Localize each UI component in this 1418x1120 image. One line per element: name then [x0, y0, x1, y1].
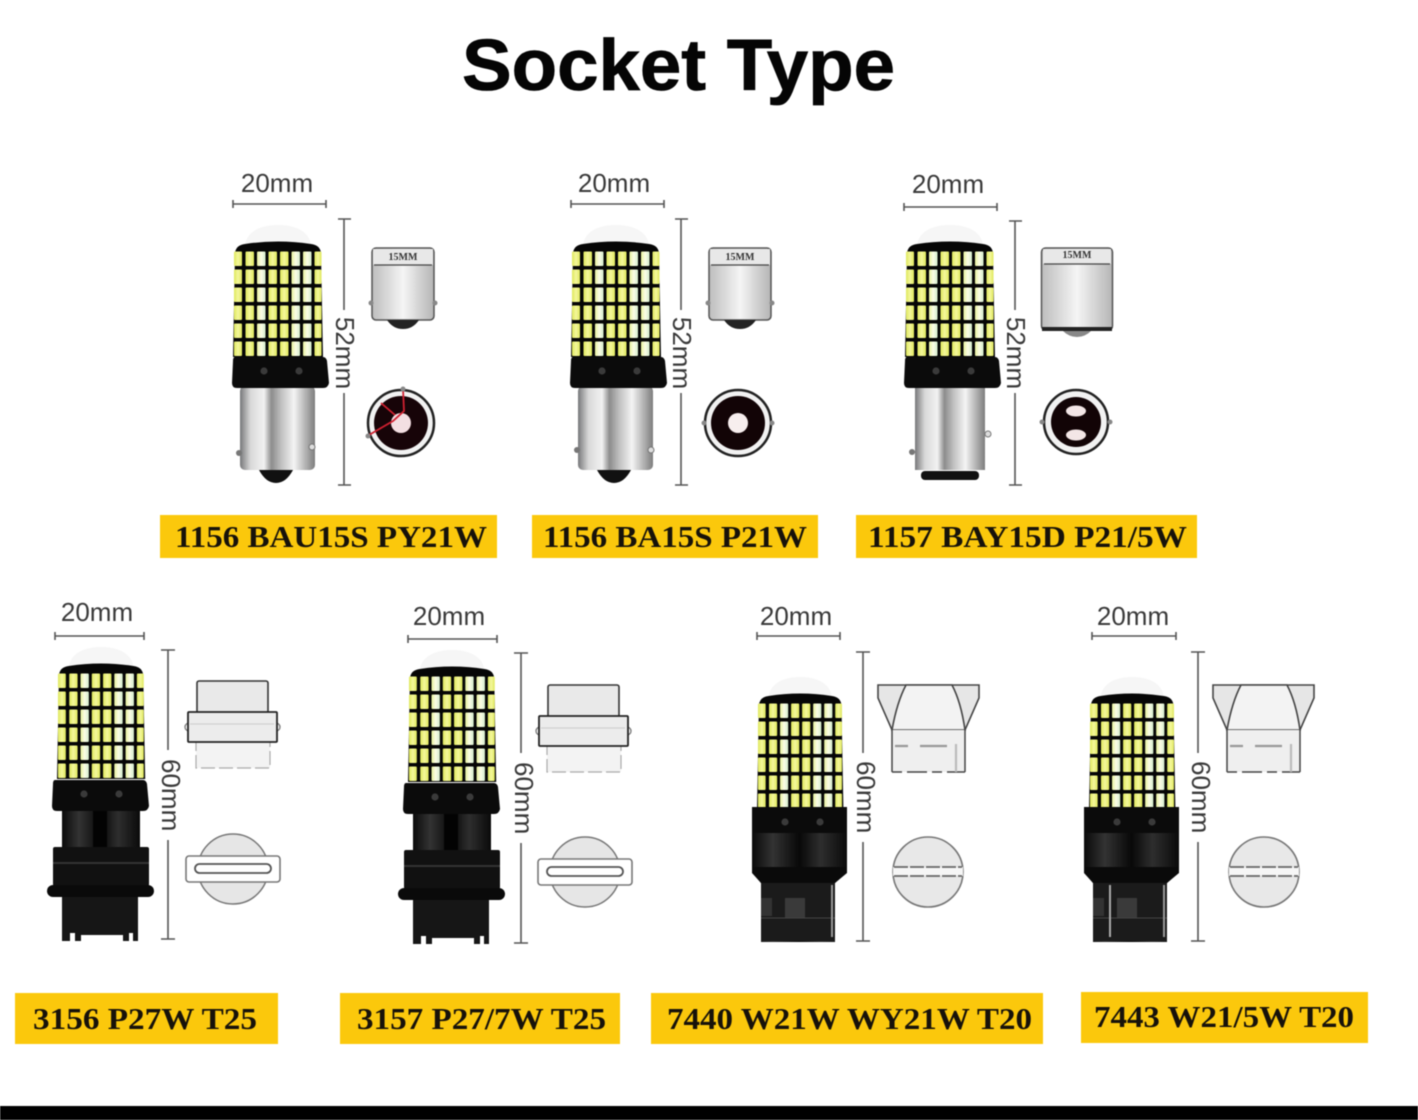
bulb: 3156 [47, 647, 154, 941]
side view socket [368, 248, 438, 329]
side view socket [536, 685, 631, 772]
dimension: width 20mm: 20mm [578, 168, 650, 198]
dimension: height 60mm: 60mm [851, 761, 881, 833]
label: 7440 W21W WY21W T20 [651, 993, 1043, 1044]
dimension: height 52mm [1001, 221, 1031, 485]
label: 3156 P27W T25 [15, 993, 278, 1044]
label: 3157 P27/7W T25 [340, 993, 620, 1044]
dimension: width 20mm [1092, 601, 1176, 640]
panel: 3157 P27/7W T25 [340, 601, 632, 1044]
dimension: height 52mm: 52mm [330, 317, 360, 389]
label: 3156 P27W T25: 3156 P27W T25 [33, 1001, 257, 1036]
side view socket [878, 685, 979, 772]
dimension: width 20mm [408, 601, 497, 643]
label: 7440 W21W WY21W T20: 7440 W21W WY21W T20 [667, 1001, 1032, 1036]
side view socket [1213, 685, 1314, 772]
side view socket [1042, 248, 1112, 337]
dimension: height 60mm: 60mm [1186, 761, 1216, 833]
dimension: width 20mm: 20mm [61, 597, 133, 627]
bottom view socket [1229, 837, 1299, 907]
bottom view socket [538, 837, 632, 907]
side view socket [185, 681, 280, 768]
dimension: height 52mm [330, 219, 360, 485]
side view socket [706, 248, 774, 329]
dimension: width 20mm [233, 168, 326, 208]
dimension: width 20mm: 20mm [760, 601, 832, 631]
dimension: height 60mm: 60mm [509, 762, 539, 834]
title: Socket Type [462, 26, 895, 106]
label: 1156 BAU15S PY21W: 1156 BAU15S PY21W [175, 519, 487, 554]
bulb: BA15S [570, 225, 667, 483]
bottom view socket [186, 834, 280, 904]
bulb: 3157 [398, 650, 505, 944]
dimension: width 20mm: 20mm [1097, 601, 1169, 631]
dimension: height 52mm [667, 219, 697, 485]
bottom view socket [893, 837, 963, 907]
label: 7443 W21/5W T20 [1081, 992, 1368, 1043]
bulb: 7440 [752, 677, 847, 942]
dimension: width 20mm [55, 597, 144, 640]
dimension: height 52mm: 52mm [667, 317, 697, 389]
dimension: width 20mm [904, 169, 997, 211]
bottom view socket [702, 390, 774, 456]
bottom black bar [0, 1106, 1418, 1120]
dimension: width 20mm: 20mm [413, 601, 485, 631]
dimension: height 60mm [156, 650, 186, 939]
dimension: width 20mm: 20mm [241, 168, 313, 198]
dimension: height 60mm [851, 652, 881, 941]
label: 7443 W21/5W T20: 7443 W21/5W T20 [1094, 999, 1354, 1034]
bulb: BAY15D [904, 225, 1001, 480]
dimension: width 20mm: 20mm [912, 169, 984, 199]
label: 3157 P27/7W T25: 3157 P27/7W T25 [357, 1001, 606, 1036]
dimension: width 20mm [571, 168, 664, 208]
side view socket: 15MM [726, 252, 755, 263]
label: 1156 BA15S P21W: 1156 BA15S P21W [543, 519, 807, 554]
panel: 1156 BAU15S PY21W [160, 168, 497, 558]
dimension: height 60mm: 60mm [156, 759, 186, 831]
panel: 1157 BAY15D P21/5W [856, 169, 1197, 558]
dimension: width 20mm [757, 601, 840, 640]
bulb: 7443 [1084, 677, 1179, 942]
bottom view socket [366, 386, 434, 456]
dimension: height 52mm: 52mm [1001, 317, 1031, 389]
panel: 1156 BA15S P21W [532, 168, 818, 558]
panel: 3156 P27W T25 [15, 597, 280, 1044]
bottom view socket [1040, 390, 1112, 454]
dimension: height 60mm [1186, 652, 1216, 941]
panel: 7440 W21W WY21W T20 [651, 601, 1043, 1044]
dimension: height 60mm [509, 653, 539, 943]
side view socket: 15MM [389, 252, 418, 263]
panel: 7443 W21/5W T20 [1081, 601, 1368, 1043]
label: 1157 BAY15D P21/5W: 1157 BAY15D P21/5W [868, 519, 1187, 554]
bulb: BAU15S [232, 225, 329, 483]
side view socket: 15MM [1063, 250, 1092, 261]
